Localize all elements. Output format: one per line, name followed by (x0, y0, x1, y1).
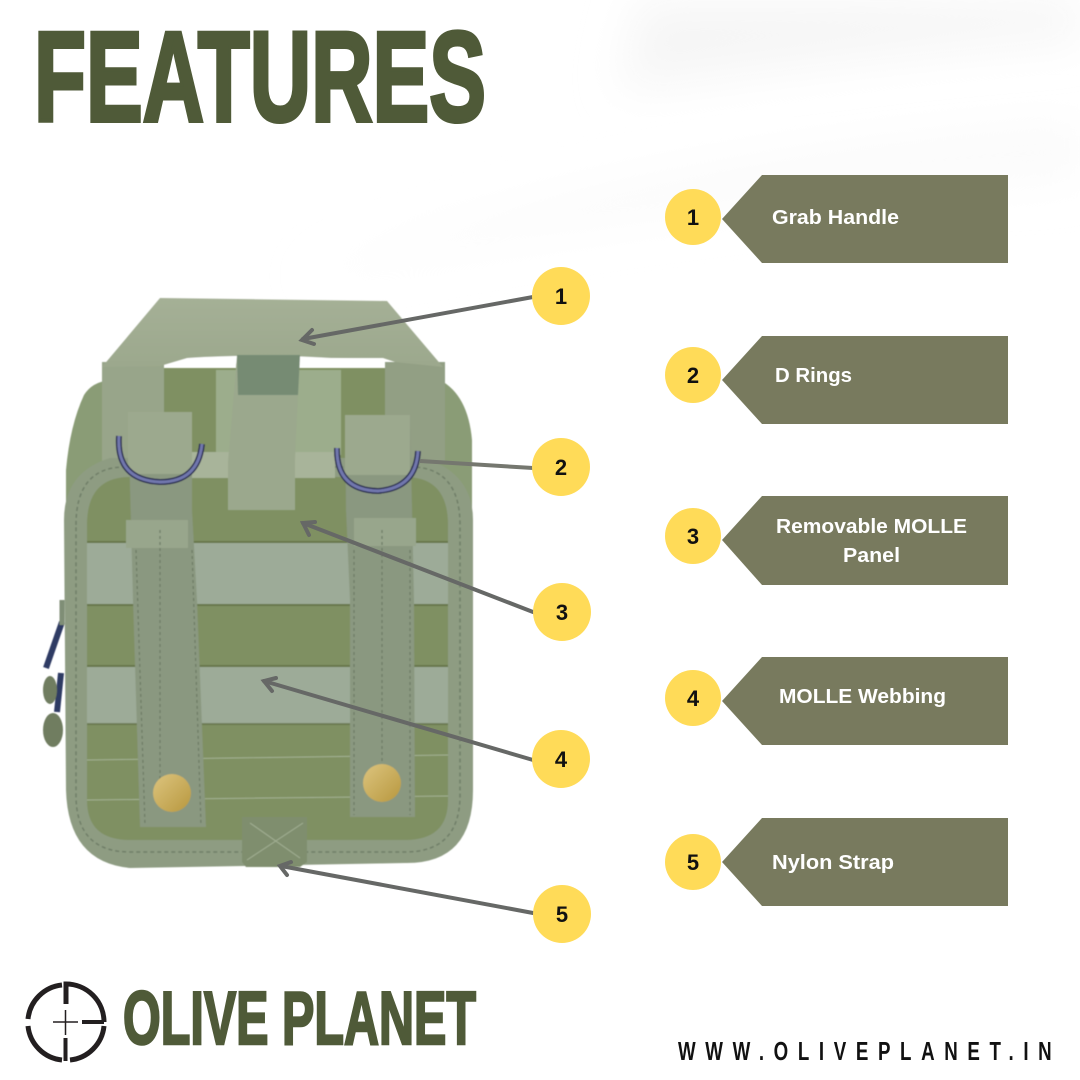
feature 5: nylon strap: Nylon Strap (772, 852, 894, 874)
center tab (228, 355, 300, 510)
feature 2: d rings: 2 (687, 363, 699, 388)
marker 3 (533, 583, 591, 641)
feature 4: molle webbing (665, 657, 1008, 745)
right d ring (337, 448, 418, 491)
marker 2 (532, 438, 590, 496)
band shadows (87, 542, 448, 724)
website url: WWW.OLIVEPLANET.IN (678, 1036, 1052, 1066)
feature 2: d rings (665, 336, 1008, 424)
arrow 3 (303, 522, 533, 612)
marker 1: 1 (555, 284, 567, 309)
top webbing band (165, 452, 335, 478)
arrow 5 (280, 862, 533, 913)
marker 1 (532, 267, 590, 325)
feature 5: nylon strap: 5 (687, 850, 699, 875)
marker 2: 2 (555, 455, 567, 480)
product image: pouch (43, 298, 473, 868)
feature 3: removable molle panel: Removable MOLLE (776, 516, 967, 538)
feature 2: d rings: D Rings (775, 365, 852, 387)
feature 4: molle webbing: 4 (687, 686, 700, 711)
marker 5 (533, 885, 591, 943)
molle band upper (87, 543, 448, 604)
marker 5: 5 (556, 902, 568, 927)
feature 3: removable molle panel: Panel (843, 545, 900, 567)
marker 3: 3 (556, 600, 568, 625)
panel stitching (76, 467, 460, 852)
upper dark lining (164, 368, 385, 458)
feature 5: nylon strap (665, 818, 1008, 906)
zipper cords (43, 600, 63, 747)
feature 4: molle webbing: MOLLE Webbing (779, 686, 946, 708)
arrow 4 (264, 678, 533, 760)
arrow 2 (420, 461, 533, 468)
velcro area (216, 370, 341, 455)
feature 3: removable molle panel (665, 496, 1008, 585)
front panel (64, 458, 473, 868)
logo wordmark: OLIVE PLANET (123, 976, 476, 1060)
feature 1: grab handle (665, 175, 1008, 263)
strap upper loops (126, 412, 416, 548)
molle band lower (87, 667, 448, 724)
handle slot (187, 356, 383, 363)
marker 4 (532, 730, 590, 788)
center tab shadow (237, 355, 300, 395)
ring highlights (119, 436, 418, 491)
left vertical strap (128, 412, 206, 827)
right snap (363, 764, 401, 802)
left snap (153, 774, 191, 812)
top handle (102, 298, 443, 367)
title: FEATURES (34, 6, 486, 149)
feature 1: grab handle: Grab Handle (772, 207, 899, 229)
feature 3: removable molle panel: 3 (687, 524, 699, 549)
panel inner field (87, 477, 448, 840)
arrow 1 (302, 297, 533, 344)
strap stitching (136, 530, 410, 825)
feature 1: grab handle: 1 (687, 205, 699, 230)
left d ring (119, 436, 202, 482)
field stitching (87, 755, 448, 800)
right vertical strap (345, 415, 415, 817)
logo icon: crosshair (28, 984, 104, 1061)
rear compartment (66, 380, 472, 560)
handle side straps (102, 362, 445, 462)
marker 4: 4 (555, 747, 568, 772)
bottom tab (242, 817, 307, 867)
